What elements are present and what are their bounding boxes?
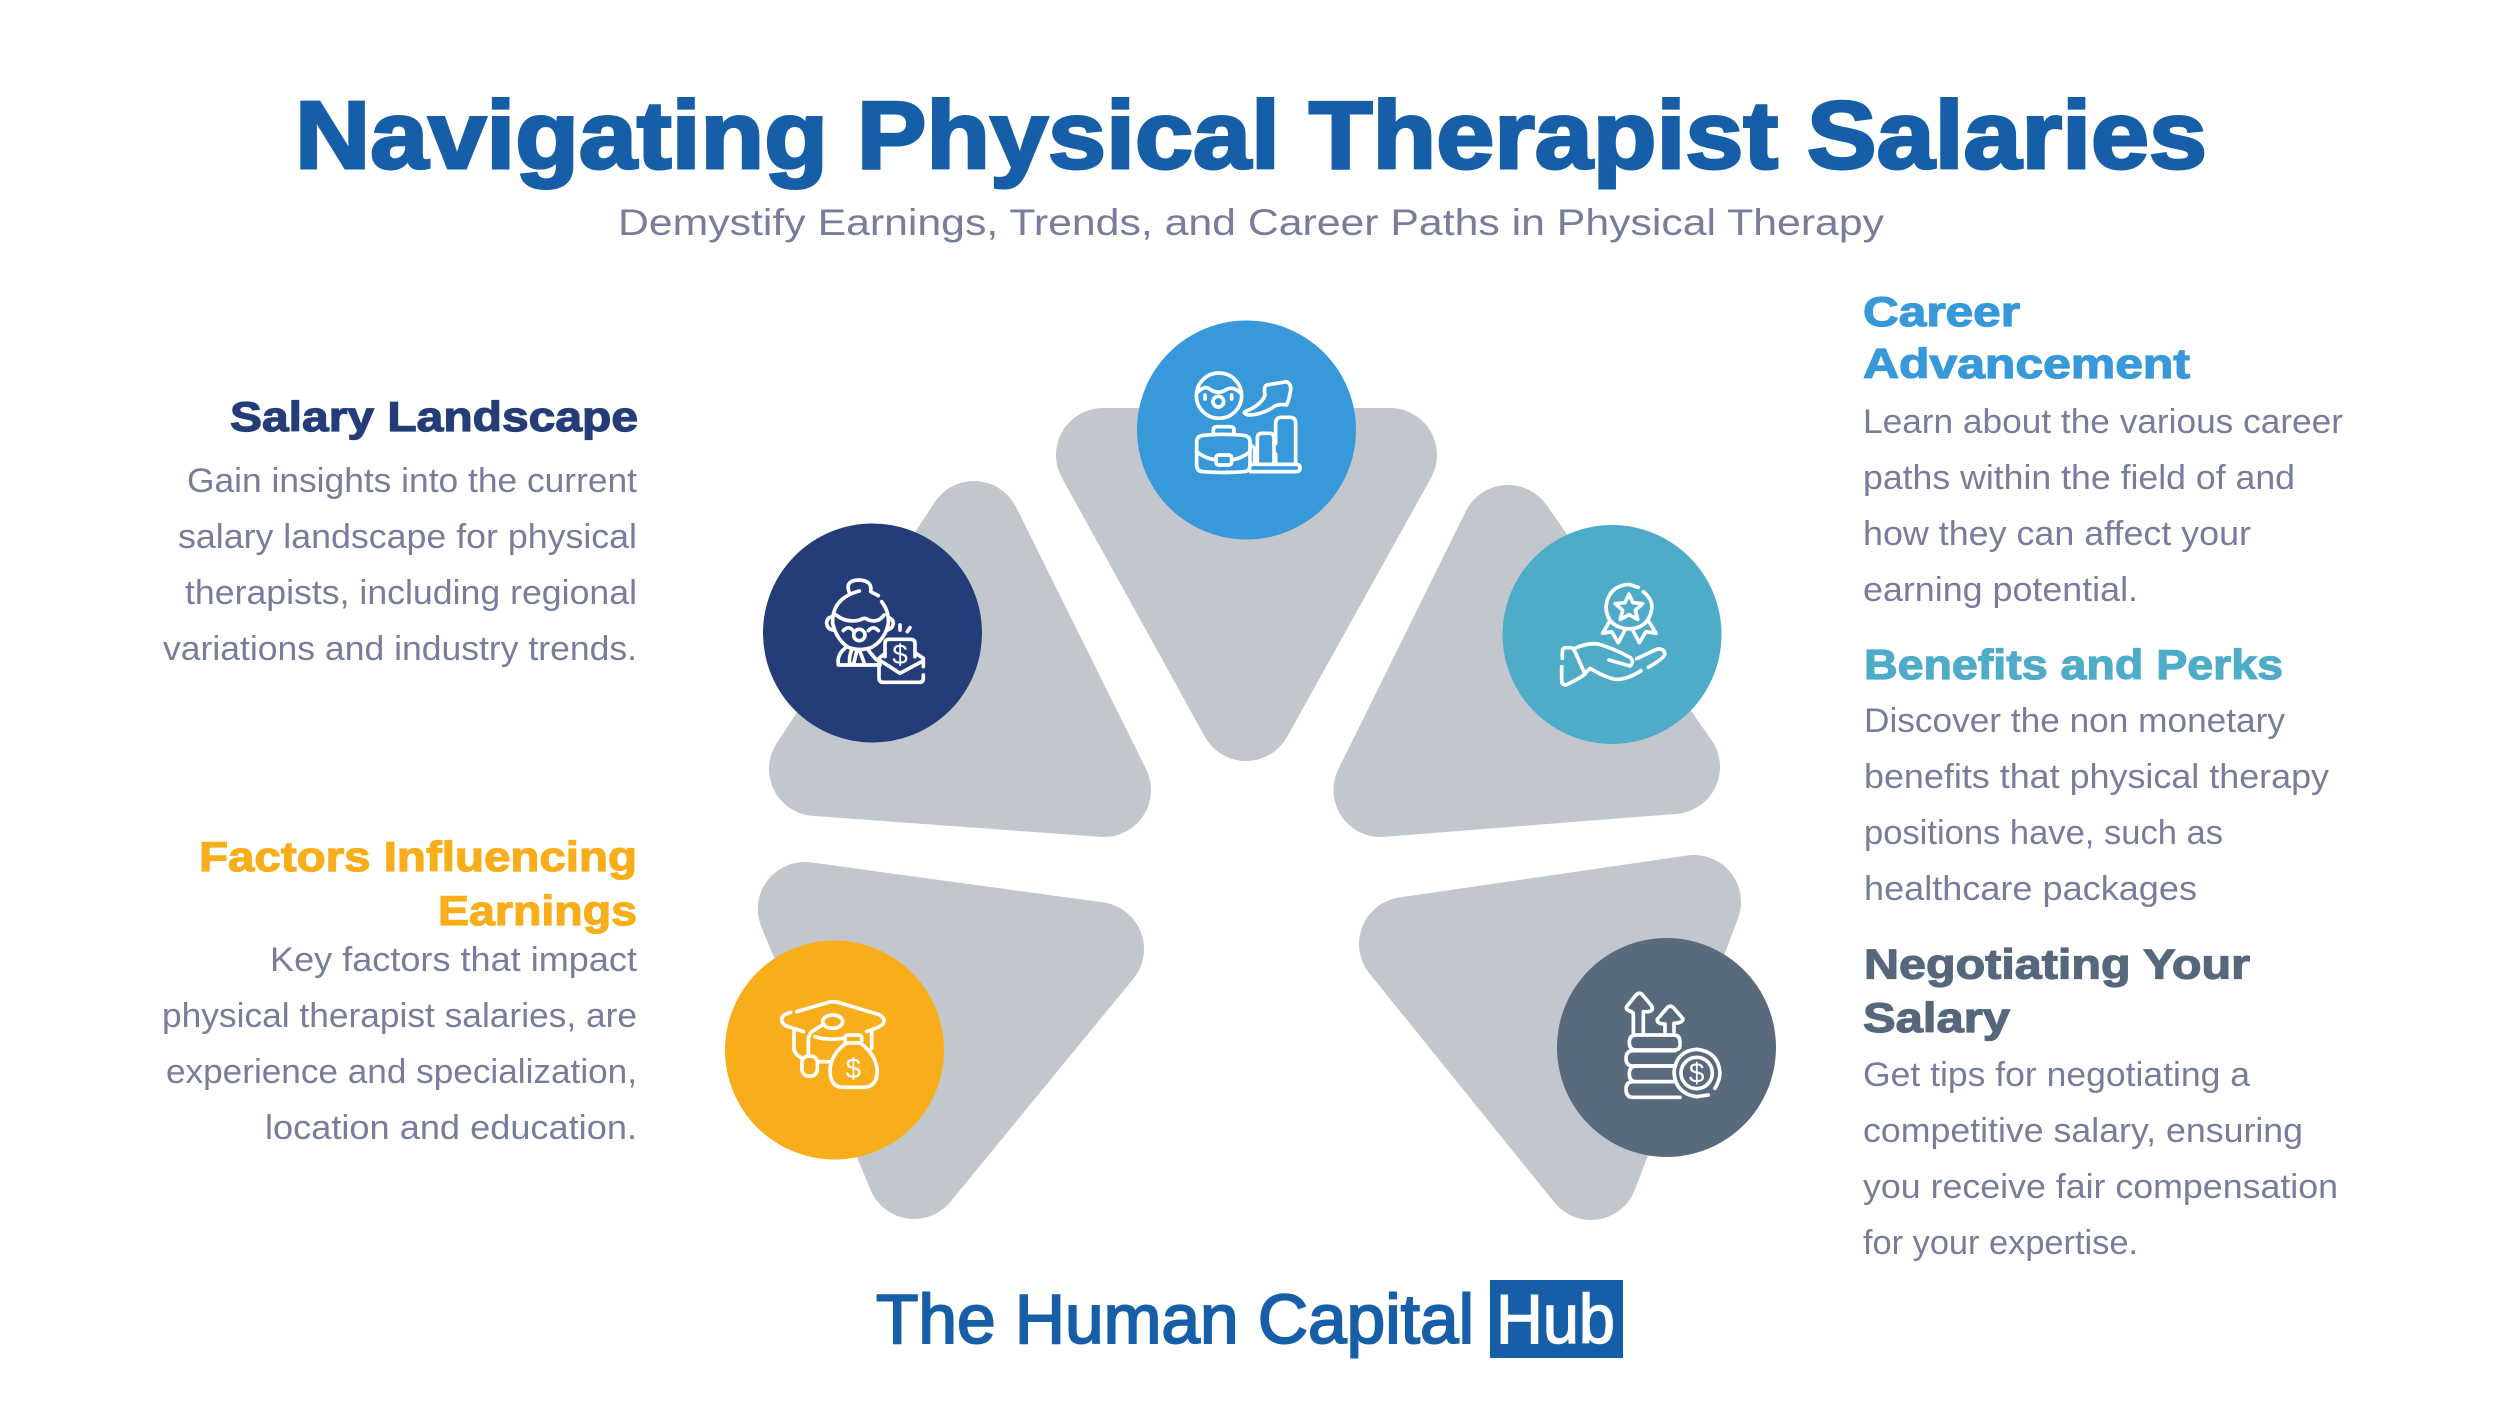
text block: career advancement: earning potential. (1863, 571, 2138, 609)
logo: The Human Capital Hub: Hub (1496, 1280, 1615, 1358)
text block: career advancement: Learn about the various career (1863, 403, 2343, 441)
heading: career advancement (1863, 288, 2190, 387)
icon: graduation cap and money bag: $ (846, 1053, 862, 1084)
heading: factors influencing earnings: Factors Influencing (199, 833, 637, 880)
circle: salary landscape (763, 524, 982, 742)
petal: lower left (805, 909, 1097, 1172)
text block: benefits and perks (1864, 702, 2329, 908)
text block: salary landscape: variations and industry trends. (163, 630, 637, 668)
text block: factors influencing earnings (162, 941, 638, 1147)
text block: salary landscape (163, 462, 638, 668)
icon: medal over open hand (1562, 584, 1665, 685)
heading: salary landscape: Salary Landscape (230, 393, 638, 440)
heading: negotiating your salary: Negotiating Your (1864, 940, 2250, 988)
text block: factors influencing earnings: experience and specialization, (166, 1053, 637, 1091)
icon: person and money envelope: $ (892, 639, 908, 670)
circle: benefits and perks (1502, 525, 1722, 744)
panel: salary landscape text (163, 393, 638, 668)
circle: factors influencing earnings (725, 940, 944, 1160)
text block: salary landscape: therapists, including regional (185, 574, 637, 612)
petal: lower right (1406, 902, 1694, 1173)
text block: benefits and perks: Discover the non monetary (1864, 702, 2285, 740)
heading: negotiating your salary: Salary (1863, 994, 2011, 1041)
heading: benefits and perks: Benefits and Perks (1864, 641, 2283, 688)
logo: The Human Capital Hub: The Human Capital (876, 1280, 1474, 1358)
text block: career advancement: paths within the field of and (1863, 459, 2295, 497)
petal: upper right (1380, 532, 1673, 790)
panel: benefits and perks text (1864, 641, 2329, 908)
icon: coin stack with up arrows (1626, 993, 1720, 1097)
text block: salary landscape: salary landscape for physical (178, 518, 637, 556)
text block: benefits and perks: benefits that physical therapy (1864, 758, 2329, 796)
icon: graduation cap and money bag (782, 1002, 884, 1087)
petal: top (1103, 455, 1390, 714)
text block: benefits and perks: healthcare packages (1864, 870, 2197, 908)
heading: career advancement: Advancement (1863, 340, 2190, 387)
circle: negotiating your salary (1557, 938, 1776, 1157)
text block: negotiating your salary (1863, 1056, 2338, 1262)
text block: career advancement: how they can affect your (1863, 515, 2251, 553)
text block: negotiating your salary: Get tips for negotiating a (1863, 1056, 2250, 1094)
icon: person, briefcase and rising chart (1196, 373, 1300, 472)
text block: negotiating your salary: competitive salary, ensuring (1863, 1112, 2303, 1150)
panel: negotiating your salary text (1863, 940, 2338, 1262)
heading: negotiating your salary (1863, 940, 2250, 1041)
text block: negotiating your salary: you receive fair compensation (1863, 1168, 2338, 1206)
circle: career advancement (1137, 320, 1356, 540)
text block: benefits and perks: positions have, such as (1864, 814, 2223, 852)
icon: person and money envelope (827, 580, 923, 682)
heading: career advancement: Career (1863, 288, 2020, 335)
panel: career advancement text (1863, 288, 2343, 609)
text block: salary landscape: Gain insights into the current (187, 462, 638, 500)
text block: factors influencing earnings: physical therapist salaries, are (162, 997, 637, 1035)
text block: negotiating your salary: for your expertise. (1863, 1224, 2138, 1262)
title: Navigating Physical Therapist Salaries (295, 82, 2207, 189)
text block: factors influencing earnings: location and education. (265, 1109, 637, 1147)
subtitle: Demystify Earnings, Trends, and Career Paths in Physical Therapy (618, 202, 1885, 243)
text block: career advancement (1863, 403, 2343, 609)
text block: factors influencing earnings: Key factors that impact (270, 941, 638, 979)
panel: factors influencing earnings text (162, 833, 638, 1147)
heading: factors influencing earnings (199, 833, 637, 934)
heading: factors influencing earnings: Earnings (438, 887, 637, 934)
icon: coin stack with up arrows: $ (1689, 1058, 1705, 1089)
petal: upper left (816, 528, 1104, 790)
